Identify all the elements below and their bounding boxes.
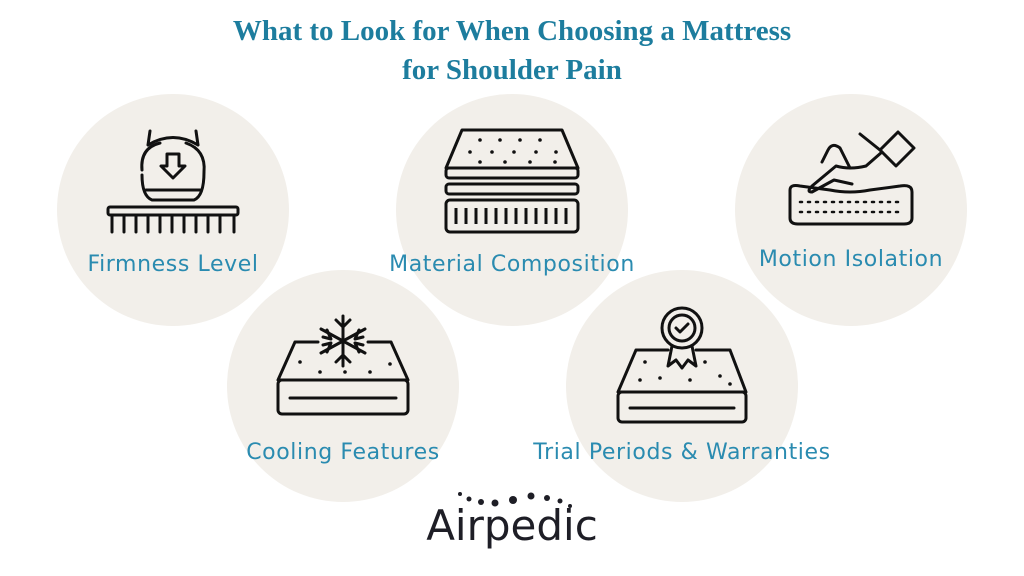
icon: hand pressing mattress — [790, 132, 914, 224]
title: What to Look for When Choosing a Mattress — [233, 15, 791, 47]
icon: award badge mattress — [618, 308, 746, 422]
panel: cooling features — [227, 270, 459, 502]
title: for Shoulder Pain — [402, 54, 622, 86]
title — [233, 15, 791, 86]
label: Cooling Features — [246, 440, 440, 465]
panel: material composition — [389, 94, 635, 326]
icon: snowflake mattress — [278, 316, 408, 414]
logo: Airpedic: Airpedic — [426, 501, 598, 550]
icon: weight on mattress — [108, 131, 238, 232]
label: Trial Periods & Warranties — [532, 440, 831, 465]
label: Material Composition — [389, 252, 635, 277]
panel: motion isolation — [735, 94, 967, 326]
panel: firmness level — [57, 94, 289, 326]
label: Firmness Level — [87, 252, 259, 277]
panel: trial periods & warranties — [532, 270, 831, 502]
icon: layered mattress — [446, 130, 578, 232]
label: Motion Isolation — [759, 247, 943, 272]
